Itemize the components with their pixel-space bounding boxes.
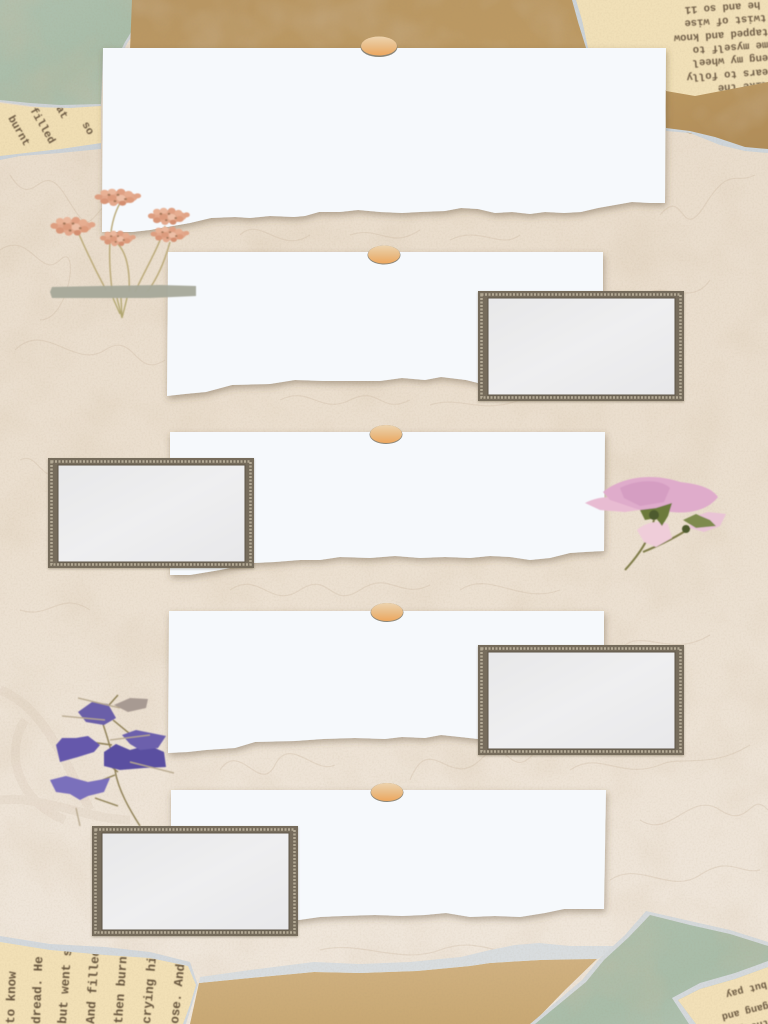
torn paper: bottom-left newspaper scrap: to know xyxy=(4,971,20,1024)
frame: left of panel 3 xyxy=(48,458,254,568)
torn paper: bottom-left newspaper scrap: then burnt xyxy=(112,948,131,1024)
icon: purple pressed flowers xyxy=(50,695,174,826)
icon: coral dried flowers with tape xyxy=(50,189,196,318)
torn paper: top-right newspaper scrap: me myself to xyxy=(692,38,768,55)
panel 1: large torn note xyxy=(102,36,666,232)
torn paper: bottom-right newspaper scrap xyxy=(672,961,768,1024)
torn paper: bottom-left newspaper scrap: but went st xyxy=(56,941,76,1024)
torn paper: bottom-left newspaper scrap: crying his xyxy=(140,948,161,1024)
torn paper: left newspaper scrap: filled xyxy=(27,106,57,146)
pin: panel 5 xyxy=(370,783,404,802)
panel 5: torn note xyxy=(171,783,606,921)
torn paper: top-right newspaper scrap: twist of wise xyxy=(684,11,767,29)
torn paper: left newspaper scrap xyxy=(0,103,101,160)
torn paper: left newspaper scrap: burnt xyxy=(5,114,31,149)
torn paper: top-right newspaper scrap: tapped and know xyxy=(673,25,768,44)
pin: panel 1 xyxy=(360,36,398,57)
frame: left of panel 5 xyxy=(92,826,298,936)
icon: pink rose xyxy=(585,477,726,570)
torn paper: bottom-left newspaper scrap: And filled xyxy=(84,948,103,1024)
torn paper: top-right newspaper scrap: like the xyxy=(717,78,768,93)
torn paper: top brown kraft xyxy=(130,0,768,153)
torn paper: top-right newspaper scrap xyxy=(572,0,768,96)
torn paper: bottom brown kraft xyxy=(190,943,615,1024)
torn paper: bottom-left newspaper scrap xyxy=(0,936,198,1024)
tape strip xyxy=(50,285,196,298)
torn paper: bottom-right green xyxy=(530,910,768,1024)
torn paper: left newspaper scrap: so xyxy=(79,120,96,138)
torn paper: bottom-left newspaper scrap: ose. And xyxy=(168,963,188,1024)
pin: panel 3 xyxy=(370,425,402,444)
torn paper: bottom-right newspaper scrap: but pay xyxy=(724,978,768,1000)
torn paper: bottom-left newspaper scrap: dread. He xyxy=(30,956,46,1024)
torn paper: top-right newspaper scrap: ears to folly xyxy=(685,65,768,83)
torn paper: left newspaper scrap: at xyxy=(53,104,70,121)
pin: panel 2 xyxy=(368,246,400,264)
pin: panel 4 xyxy=(370,603,404,622)
panel 2: torn note xyxy=(167,246,603,396)
frame: right of panel 4 xyxy=(478,645,684,755)
panel 3: torn note xyxy=(170,425,605,575)
frame: right of panel 2 xyxy=(478,291,684,401)
torn paper: top-right newspaper scrap: eng my wheel xyxy=(692,51,768,68)
panel 4: torn note xyxy=(168,603,604,753)
torn paper: top-left green xyxy=(0,0,132,108)
